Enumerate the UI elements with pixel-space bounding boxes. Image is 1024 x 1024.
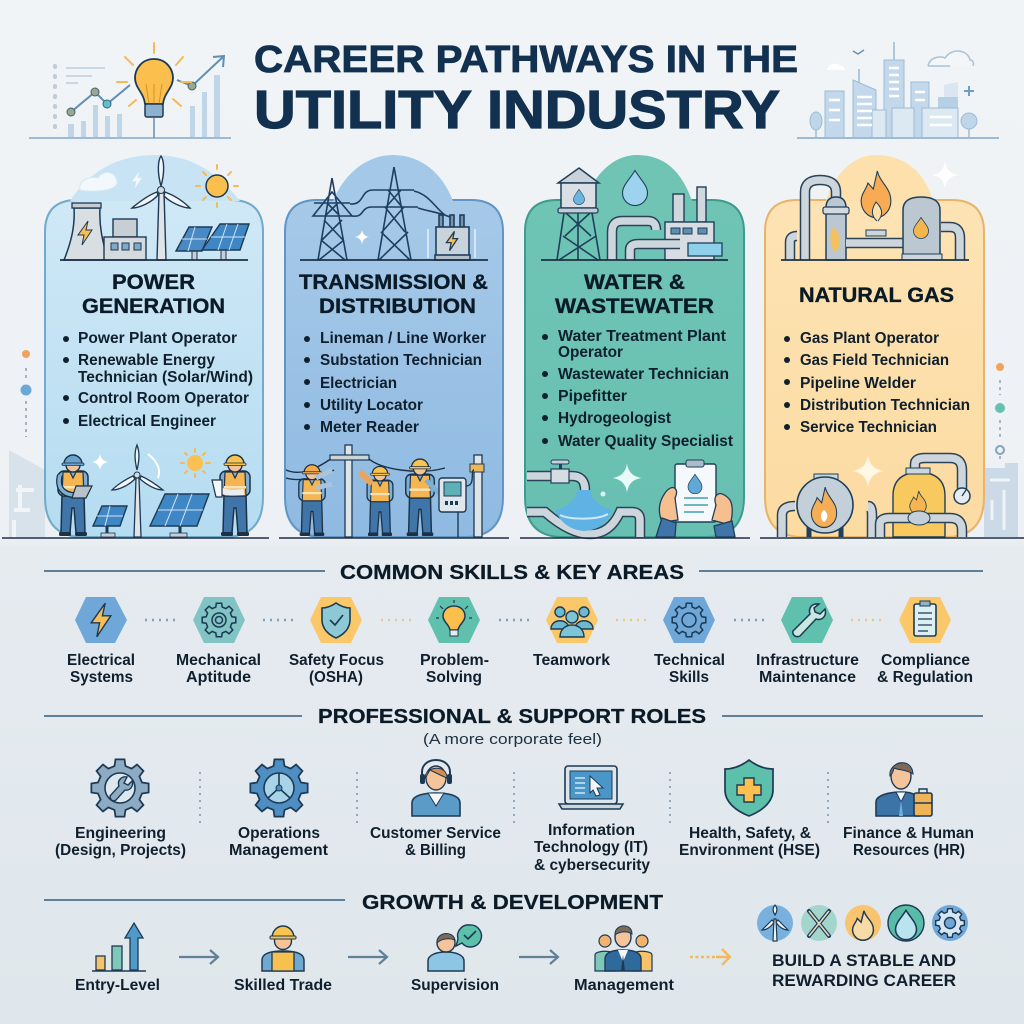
skill: mechanical aptitude: Aptitude <box>186 669 251 686</box>
icon: water drop circle <box>888 905 924 941</box>
role: engineering: Engineering <box>75 825 166 842</box>
section heading: professional and support roles <box>44 706 983 748</box>
role: operations management <box>229 759 329 859</box>
panel shape <box>525 155 744 537</box>
skill: electrical systems: Systems <box>70 669 133 686</box>
role: finance and human resources: Resources (HR) <box>853 842 965 859</box>
closing text: REWARDING CAREER <box>772 971 956 990</box>
skill: problem solving: Solving <box>426 669 482 686</box>
role: engineering: (Design, Projects) <box>55 842 186 859</box>
skill: safety focus <box>289 597 384 686</box>
arrow <box>179 950 218 964</box>
job list: Wastewater Technician <box>558 366 729 383</box>
step: management <box>574 926 675 994</box>
job list <box>542 328 733 450</box>
role: health safety environment: Environment (HSE) <box>679 842 820 859</box>
skill: technical skills <box>654 597 725 686</box>
job list: Water Treatment Plant <box>558 328 726 345</box>
role: customer service: & Billing <box>405 842 466 859</box>
job list: Substation Technician <box>320 352 482 369</box>
skill: safety focus: (OSHA) <box>309 669 363 686</box>
section heading: professional and support roles: (A more corporate feel) <box>423 731 602 748</box>
role: information technology: & cybersecurity <box>534 857 650 874</box>
role: health safety environment: Health, Safety, & <box>689 825 811 842</box>
skill: mechanical aptitude <box>176 597 261 686</box>
illustration: pylons and transformer <box>300 167 488 260</box>
heading <box>299 271 488 318</box>
icon: wind turbine circle <box>757 905 793 941</box>
skill: compliance and regulation: & Regulation <box>877 669 973 686</box>
job list: Pipeline Welder <box>800 375 916 392</box>
callout: build a stable and rewarding career <box>757 905 968 990</box>
job list: Lineman / Line Worker <box>320 330 486 347</box>
job list: Electrician <box>320 375 397 392</box>
job list: Utility Locator <box>320 397 423 414</box>
step: skilled trade: Skilled Trade <box>234 977 332 994</box>
heading: POWER <box>112 271 195 294</box>
role: finance and human resources: Finance & Human <box>843 825 974 842</box>
role: health safety environment <box>679 760 820 859</box>
skills row <box>67 597 973 686</box>
illustration: tap, water basin and clipboard <box>527 460 735 537</box>
closing text: BUILD A STABLE AND <box>772 951 956 970</box>
job list <box>63 330 253 430</box>
job list: Control Room Operator <box>78 390 249 407</box>
skill: teamwork <box>533 597 610 669</box>
panel: power generation <box>45 155 263 537</box>
light bulb <box>135 59 173 117</box>
role: finance and human resources <box>843 763 974 859</box>
panel: transmission and distribution <box>285 155 503 537</box>
skill: safety focus: Safety Focus <box>289 652 384 669</box>
panel shape <box>765 155 984 537</box>
job list: Meter Reader <box>320 419 419 436</box>
skill: technical skills: Technical <box>654 652 725 669</box>
job list: Gas Field Technician <box>800 352 949 369</box>
job list <box>304 330 486 436</box>
section heading: growth and development: GROWTH & DEVELOPMENT <box>362 892 663 914</box>
skill: infrastructure maintenance: Infrastructure <box>756 652 859 669</box>
arrow head: to career <box>716 949 730 965</box>
illustration: gas pipework, flame and tank <box>781 162 969 260</box>
role: operations management: Management <box>229 842 329 859</box>
job list: Hydrogeologist <box>558 410 671 427</box>
skill: teamwork: Teamwork <box>533 652 610 669</box>
panel shape <box>45 155 263 537</box>
chart bars <box>68 75 220 138</box>
icon: city skyline <box>797 42 999 138</box>
panel: natural gas <box>765 155 984 537</box>
role: information technology <box>534 766 650 874</box>
job list: Pipefitter <box>558 388 627 405</box>
step: entry level: Entry-Level <box>75 977 160 994</box>
arrow <box>519 950 558 964</box>
skill: problem solving <box>420 597 489 686</box>
role: information technology: Information <box>548 822 635 839</box>
professional roles row <box>55 759 974 874</box>
side decoration right <box>984 363 1018 537</box>
step: supervision: Supervision <box>411 977 499 994</box>
role: engineering <box>55 759 186 859</box>
heading <box>82 271 225 318</box>
chart line with arrow <box>67 56 224 116</box>
step: entry level <box>75 923 160 994</box>
title <box>254 39 798 140</box>
job list: Service Technician <box>800 419 937 436</box>
section heading: common skills: COMMON SKILLS & KEY AREAS <box>340 562 684 584</box>
heading: DISTRIBUTION <box>319 295 476 318</box>
skill: technical skills: Skills <box>669 669 709 686</box>
job list: Renewable Energy <box>78 352 215 369</box>
job list <box>784 330 970 436</box>
icon: flame circle <box>845 905 881 941</box>
role: customer service <box>370 760 501 859</box>
illustration: gas tanks and gauge <box>782 455 970 537</box>
skill: compliance and regulation <box>877 597 973 686</box>
job list: Power Plant Operator <box>78 330 237 347</box>
icon: gear circle <box>932 905 968 941</box>
illustration: plant, turbine, solar <box>60 156 249 260</box>
arrow: to career <box>690 956 716 958</box>
panel: water and wastewater <box>525 155 744 537</box>
job list: Operator <box>558 344 623 361</box>
icon: tools circle <box>801 905 837 941</box>
skill: electrical systems <box>67 597 135 686</box>
illustration: workers with renewables <box>58 445 250 537</box>
step: supervision <box>411 925 499 994</box>
heading: WASTEWATER <box>555 295 714 318</box>
heading: WATER & <box>584 271 685 294</box>
skill: problem solving: Problem- <box>420 652 489 669</box>
heading: GENERATION <box>82 295 225 318</box>
skill: infrastructure maintenance <box>756 597 859 686</box>
skill: electrical systems: Electrical <box>67 652 135 669</box>
job list: Distribution Technician <box>800 397 970 414</box>
title: CAREER PATHWAYS IN THE <box>254 39 798 81</box>
job list: Electrical Engineer <box>78 413 216 430</box>
role: customer service: Customer Service <box>370 825 501 842</box>
ground lines <box>2 537 1024 539</box>
section heading: professional and support roles: PROFESSIONAL & SUPPORT ROLES <box>318 706 706 728</box>
skill: infrastructure maintenance: Maintenance <box>759 669 856 686</box>
side decoration left <box>9 350 45 537</box>
heading: NATURAL GAS <box>799 284 954 307</box>
icon: lightbulb with rising chart <box>29 43 231 138</box>
heading: TRANSMISSION & <box>299 271 488 294</box>
step: management: Management <box>574 977 675 994</box>
skill: compliance and regulation: Compliance <box>881 652 970 669</box>
closing text <box>772 951 956 990</box>
role: operations management: Operations <box>238 825 320 842</box>
role: information technology: Technology (IT) <box>534 839 648 856</box>
job list: Technician (Solar/Wind) <box>78 369 253 386</box>
illustration: line workers at pole and meter <box>286 445 484 537</box>
job list: Gas Plant Operator <box>800 330 939 347</box>
job list: Water Quality Specialist <box>558 433 733 450</box>
panel shape <box>285 155 503 537</box>
career ladder <box>75 923 730 994</box>
step: skilled trade <box>234 926 332 994</box>
title: UTILITY INDUSTRY <box>254 80 780 140</box>
arrow <box>348 950 387 964</box>
skill: mechanical aptitude: Mechanical <box>176 652 261 669</box>
heading <box>555 271 714 318</box>
illustration: water tower and treatment plant <box>541 168 728 260</box>
